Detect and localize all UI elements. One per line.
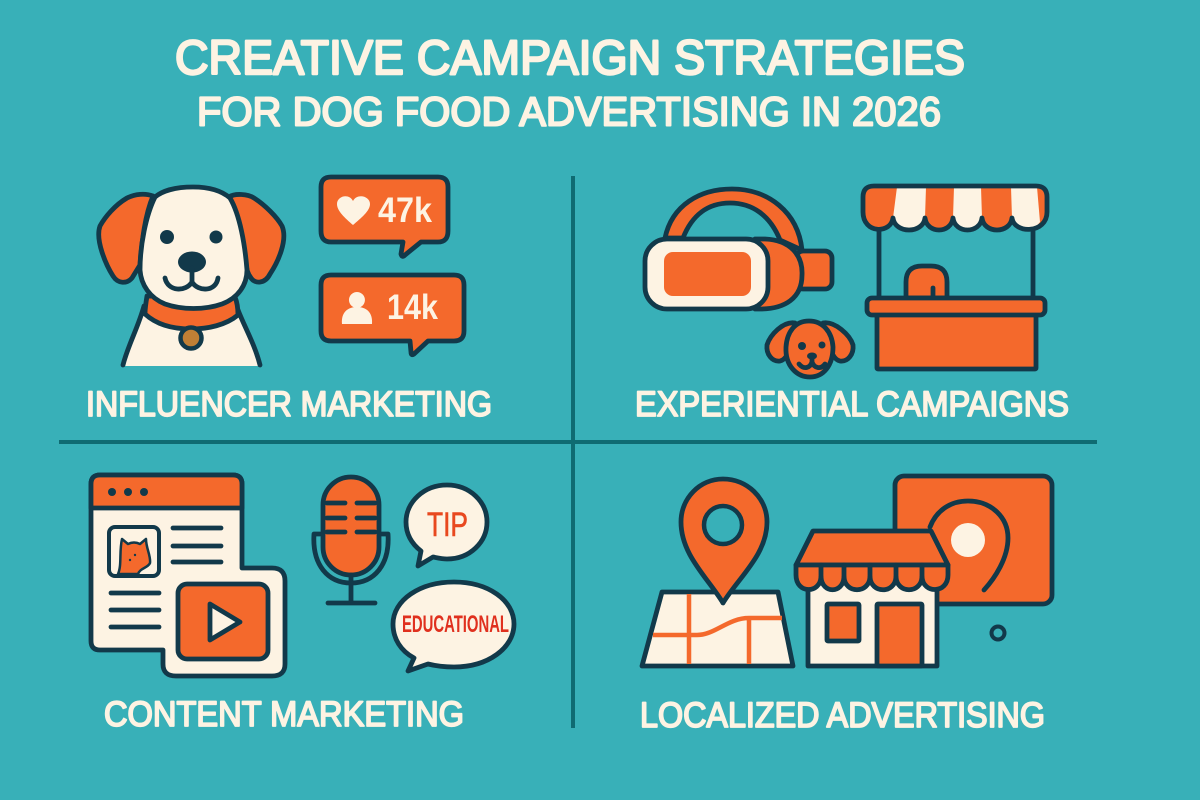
likes count: 47k <box>378 191 432 230</box>
callout: tip: TIP <box>427 506 468 544</box>
awning <box>863 186 1047 230</box>
icon: likes bubble <box>321 177 448 256</box>
icon: small dog <box>767 321 853 377</box>
callout: tip <box>406 485 487 566</box>
icon: dog portrait <box>99 187 284 366</box>
icon: market stall <box>863 186 1047 369</box>
icon: pet thumbnail <box>118 539 150 574</box>
callout: educational: EDUCATIONAL <box>402 611 509 638</box>
label: experiential campaigns: EXPERIENTIAL CAMPAIGNS <box>635 385 1069 424</box>
icon: location pin <box>681 479 767 603</box>
icon: person <box>342 292 372 324</box>
icon: followers bubble <box>321 275 464 355</box>
label: localized advertising: LOCALIZED ADVERTISING <box>640 696 1045 735</box>
icon: heart <box>337 196 370 225</box>
callout: educational <box>393 582 514 671</box>
panel: localized advertising <box>640 476 1052 735</box>
icon: map <box>642 592 793 666</box>
icon: microphone <box>314 477 388 603</box>
label: content marketing: CONTENT MARKETING <box>104 695 464 734</box>
label: influencer marketing: INFLUENCER MARKETING <box>86 385 492 424</box>
icon: billboard with location marker <box>895 476 1052 604</box>
icon: VR headset <box>645 189 832 309</box>
title: CREATIVE CAMPAIGN STRATEGIES <box>175 32 965 85</box>
panel: influencer marketing <box>86 177 492 424</box>
title: FOR DOG FOOD ADVERTISING IN 2026 <box>197 88 941 134</box>
icon: browser window with video <box>91 475 285 676</box>
icon: storefront <box>796 531 948 666</box>
panel: experiential campaigns <box>635 186 1069 424</box>
icon: small dot <box>992 626 1004 640</box>
followers count: 14k <box>387 288 438 327</box>
panel: content marketing <box>91 475 514 734</box>
title <box>175 32 965 134</box>
